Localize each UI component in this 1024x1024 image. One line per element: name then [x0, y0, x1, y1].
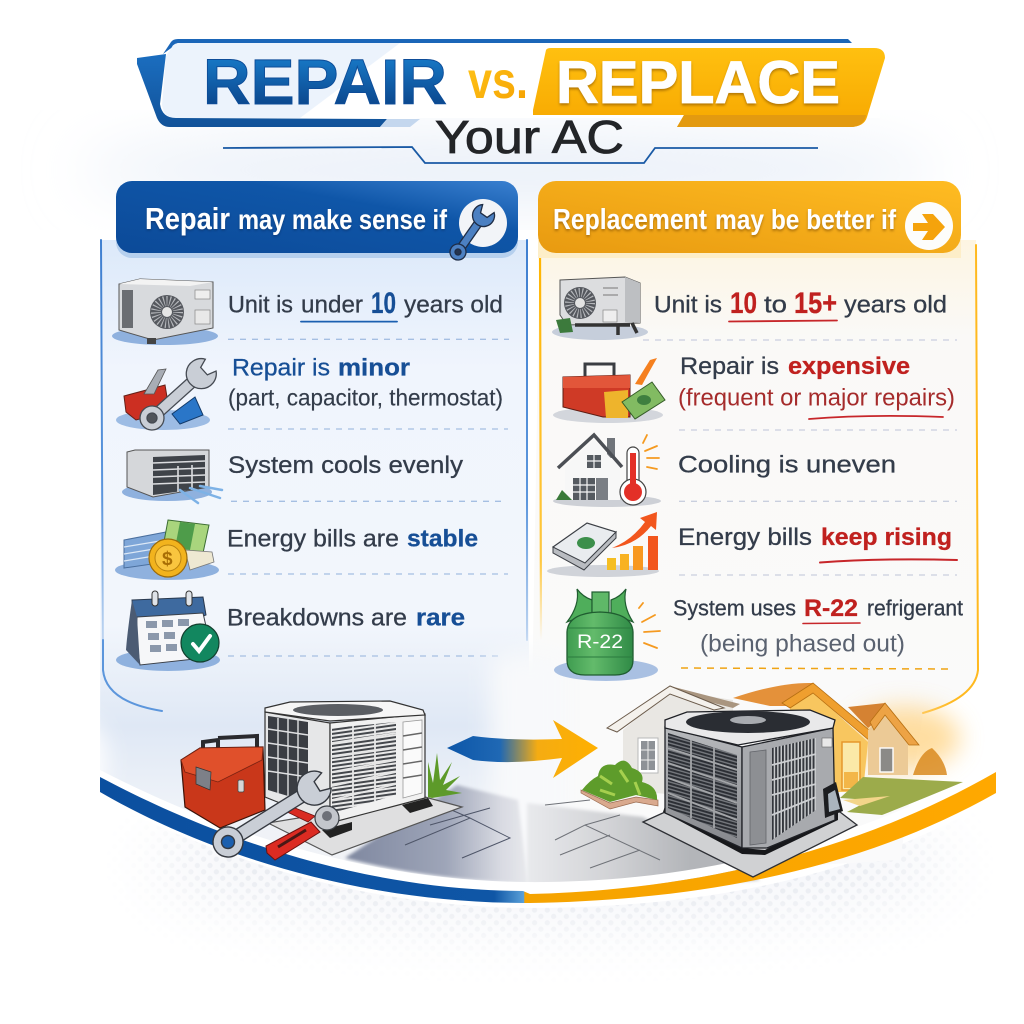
text: energy bills keep rising [678, 524, 957, 562]
row: repair expensive [553, 353, 955, 423]
text: repair is expensive [680, 353, 910, 380]
icon: book and rising chart [547, 512, 659, 577]
title word REPLACE: REPLACE [556, 49, 840, 116]
text: being phased out: (being phased out) [700, 631, 905, 658]
header text: may make sense if [238, 204, 448, 235]
red pliers [266, 806, 339, 860]
row: energy stable [115, 520, 478, 580]
distant bush [913, 748, 947, 775]
paving right lines [545, 800, 660, 868]
row: bills rising [547, 512, 957, 577]
plant [428, 753, 462, 798]
white banner interior [162, 43, 880, 124]
concrete pad [268, 797, 462, 855]
panel background [100, 240, 530, 882]
icon: indoor unit [122, 450, 222, 503]
tank label: R-22 [577, 632, 623, 653]
text: system uses r-22 refrigerant: refrigerant [867, 596, 963, 621]
centre seam fade [490, 650, 570, 890]
halftone under the curve [164, 838, 938, 938]
unit body [665, 710, 835, 848]
text: system cools evenly: System cools evenly [228, 452, 463, 479]
row: breakdowns rare [116, 591, 465, 671]
feet [322, 798, 433, 838]
text: energy bills keep rising: keep rising [821, 524, 952, 551]
ground right [527, 803, 760, 885]
text: system uses r-22 refrigerant: System uses [673, 596, 796, 621]
header text: may be better if [715, 204, 897, 235]
arrow between units [447, 720, 598, 778]
header text: Replacement [553, 204, 707, 236]
text: unit is under 10 years old: years old [404, 292, 503, 319]
header text [145, 201, 448, 236]
title word vs.: vs. [468, 52, 528, 110]
text: unit is under 10 years old: Unit is [228, 292, 293, 319]
panel: repair [58, 181, 530, 882]
text: part, capacitor, thermostat: (part, capacitor, thermostat) [228, 385, 503, 411]
icon: r-22 tank [554, 589, 660, 681]
text: breakdowns are rare: rare [416, 605, 465, 632]
title word REPAIR: REPAIR [203, 46, 447, 118]
row: uneven cooling [553, 435, 896, 507]
blue top rule [163, 39, 852, 54]
text: unit is 10 to 15+ years old: Unit is [654, 291, 722, 318]
text: unit is 10 to 15+ years old: years old [844, 291, 947, 318]
houses [581, 683, 963, 815]
text: frequent or major repairs: (frequent or major repairs) [678, 385, 955, 412]
pad [643, 812, 857, 877]
paving left [345, 785, 528, 884]
panel: replacement [490, 181, 978, 890]
blue banner shape [137, 54, 387, 127]
text: unit is under 10 years old: under [301, 292, 363, 319]
text: repair is minor: Repair is [232, 355, 330, 382]
icon: house and thermometer [553, 435, 661, 507]
row: unit age [112, 279, 503, 345]
tan house [848, 703, 919, 775]
base shadow [663, 806, 838, 855]
text: energy bills are stable: Energy bills are [227, 526, 399, 553]
text: repair is expensive: Repair is [680, 353, 779, 380]
header [116, 181, 518, 265]
text: repair is minor: minor [338, 355, 410, 382]
gray house [607, 686, 740, 800]
icon: calendar with check [116, 591, 220, 671]
text: unit is 10 to 15+ years old: 10 [730, 287, 757, 320]
icon: arrow circle [905, 202, 953, 250]
row: unit age [552, 277, 947, 340]
panel outline [101, 240, 527, 711]
text: energy bills are stable: stable [407, 526, 478, 553]
unit body [265, 701, 425, 823]
bottom scene [100, 683, 1000, 903]
icon: bills and coin [115, 520, 219, 580]
text: energy bills keep rising: Energy bills [678, 524, 812, 551]
row: cools evenly [122, 450, 463, 503]
left unit [181, 701, 462, 864]
panel outline [540, 245, 541, 640]
text: unit is under 10 years old: 10 [371, 287, 396, 320]
panel background [532, 240, 978, 882]
text: unit is 10 to 15+ years old: 15+ [794, 287, 837, 320]
title words Your AC: Your AC [435, 111, 624, 163]
lawn [840, 777, 963, 815]
row: r-22 [554, 589, 963, 681]
icon: toolbox and money [553, 358, 665, 423]
orange house [733, 683, 881, 792]
toolbox [181, 736, 265, 828]
header [538, 181, 961, 258]
right unit [643, 710, 857, 877]
title banner [137, 39, 885, 163]
icon: old outdoor unit [552, 277, 648, 340]
text: energy bills are stable [227, 526, 478, 553]
text: unit is under 10 years old [228, 287, 503, 322]
text: breakdowns are rare: Breakdowns are [227, 605, 407, 632]
icon: outdoor unit [112, 279, 218, 345]
header text: Repair [145, 201, 230, 236]
subtitle frame [223, 147, 818, 163]
row: repair minor [116, 354, 503, 437]
icon: toolbox and wrench [116, 354, 221, 437]
text: repair is expensive: expensive [788, 353, 910, 380]
silver wrench [206, 766, 335, 864]
icon: bills and coin: $ [162, 549, 173, 570]
shrub with planter [581, 761, 658, 809]
curved band [100, 762, 1000, 903]
text: system uses r-22 refrigerant [673, 595, 963, 624]
orange banner shape [533, 48, 885, 127]
service box [823, 782, 843, 818]
glow behind houses [850, 706, 960, 770]
text: unit is 10 to 15+ years old [654, 287, 947, 322]
left edge fade [58, 720, 106, 804]
text: repair is minor [232, 355, 410, 382]
icon: wrench [444, 199, 507, 265]
text: cooling is uneven: Cooling is uneven [678, 452, 896, 479]
text: system uses r-22 refrigerant: R-22 [804, 595, 858, 622]
header text [553, 204, 897, 236]
text: unit is 10 to 15+ years old: to [764, 291, 787, 318]
